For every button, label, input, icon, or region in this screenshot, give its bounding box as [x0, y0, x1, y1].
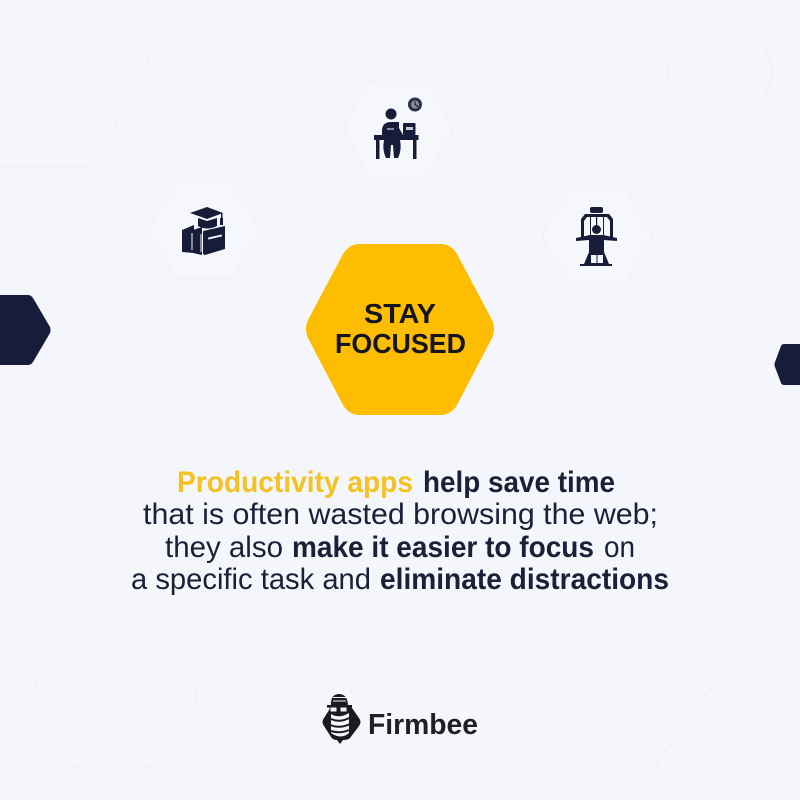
- icon hexagon: exercise machine with book: [543, 187, 651, 285]
- description text: make it easier to focus: [292, 531, 594, 564]
- left dark hexagon: [0, 295, 50, 365]
- description text: they also: [165, 531, 283, 564]
- badge title: STAY: [364, 298, 436, 329]
- central yellow hexagon badge: [306, 244, 494, 415]
- description text: that is often wasted browsing the web;: [143, 498, 658, 531]
- badge title: FOCUSED: [335, 328, 466, 359]
- description text: a specific task and: [131, 563, 371, 596]
- right dark hexagon: [774, 344, 800, 385]
- description text: Productivity apps: [177, 466, 413, 499]
- description text: help save time: [423, 466, 615, 499]
- Firmbee logo: [322, 694, 478, 744]
- logo wordmark: Firmbee: [368, 709, 478, 741]
- icon hexagon: graduation cap on books: [150, 182, 258, 279]
- logo mark: bee: [322, 694, 360, 744]
- description text: eliminate distractions: [380, 563, 669, 596]
- description text: on: [604, 531, 635, 564]
- description text: [131, 466, 669, 596]
- badge title: [335, 298, 466, 359]
- icon hexagon: desk worker: [344, 80, 452, 178]
